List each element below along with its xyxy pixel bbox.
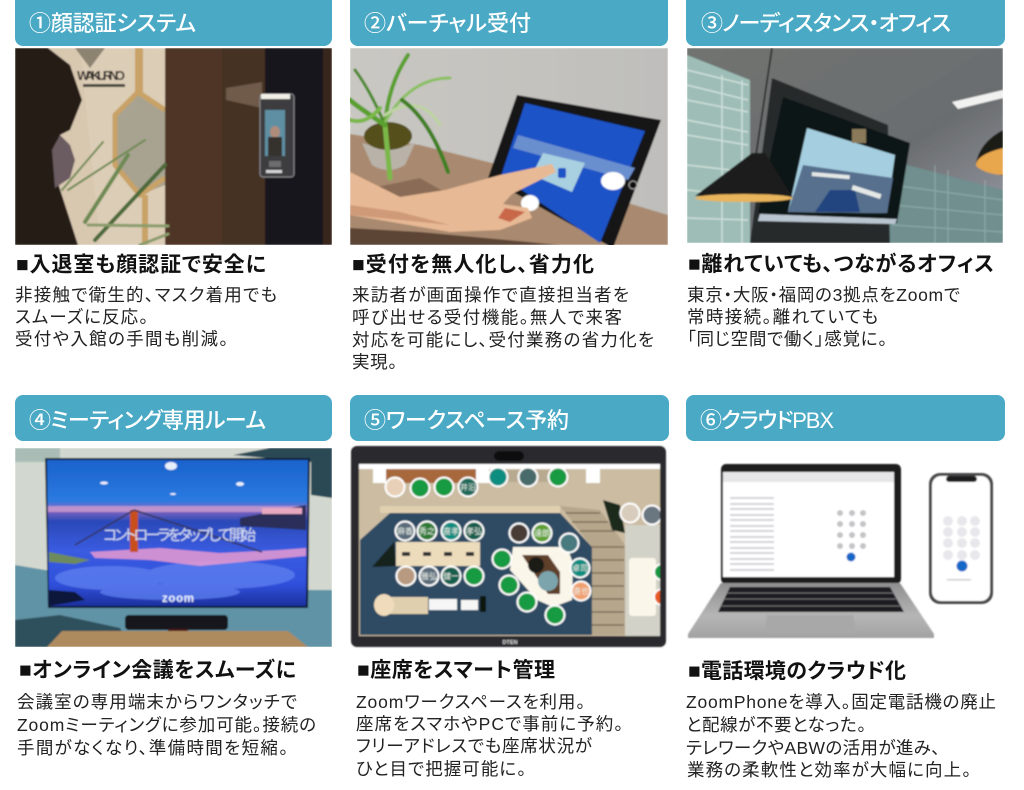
body text 6: ZoomPhoneを導入。固定電話機の廃止 (686, 692, 996, 712)
photo: seat map on display: DTEN (503, 640, 518, 646)
body text 6: 業務の柔軟性と効率が大幅に向上。 (687, 760, 971, 780)
photo: Zoom Rooms display (15, 448, 332, 647)
header bar 4: ④ミーティング専用ルーム (29, 408, 266, 433)
body text 3: 常時接続。離れていても (687, 307, 878, 327)
photo: Zoom Rooms display: コントローラをタップして開始 (103, 527, 256, 544)
header bar 5: ⑤ワークスペース予約 (364, 408, 569, 433)
photo: face recognition terminal: WAKURINO (77, 68, 125, 83)
photo: seat map on display: 麻香 (397, 526, 413, 536)
heading 1: ■入退室も顔認証で安全に (16, 254, 266, 276)
header bar 6: ⑥クラウドPBX (700, 408, 834, 433)
body text 3 (687, 285, 960, 349)
photo: laptop and smartphone dialer (687, 462, 994, 639)
body text 6: と配線が不要となった。 (686, 715, 866, 735)
body text 2: 呼び出せる受付機能。無人で来客 (352, 308, 622, 328)
body text 6 (686, 692, 996, 780)
body text 1: 非接触で衛生的、マスク着用でも (15, 285, 277, 305)
body text 4: 会議室の専用端末からワンタッチで (17, 692, 297, 712)
body text 4 (17, 692, 316, 758)
panel: 5 workspace reservation (350, 395, 670, 779)
heading 3: ■離れていても、つながるオフィス (688, 252, 994, 276)
body text 2: 対応を可能にし、受付業務の省力化を (352, 330, 654, 350)
photo: seat map on display (350, 445, 668, 648)
panel: 3 no-distance office (686, 0, 1005, 349)
laptop (688, 464, 934, 638)
body text 3: 「同じ空間で働く」感覚に。 (687, 329, 887, 349)
heading 4: ■オンライン会議をスムーズに (19, 658, 296, 682)
body text 5: Zoomワークスペースを利用。 (356, 692, 585, 712)
body text 2: 来訪者が画面操作で直接担当者を (352, 285, 629, 305)
photo: Zoom Rooms display: zoom (162, 593, 194, 605)
photo: seat map on display: 直也 (573, 586, 589, 596)
body text 1: 受付や入館の手間も削減。 (15, 329, 228, 349)
body text 6: テレワークやABWの活用が進み、 (686, 738, 940, 758)
smartphone (929, 473, 993, 604)
photo: seat map on display: 卓司 (572, 563, 588, 573)
header bar 2 (350, 0, 668, 46)
header bar 3 (686, 0, 1005, 46)
panel: 6 cloud PBX (686, 395, 1005, 780)
body text 2: 実現。 (352, 352, 397, 372)
body text 5: フリーアドレスでも座席状況が (356, 736, 593, 756)
body text 1 (15, 285, 277, 349)
heading 2: ■受付を無人化し、省力化 (352, 254, 594, 276)
photo: seat map on display: 雅弘 (421, 571, 437, 581)
panel: 4 meeting room (15, 395, 332, 758)
photo: wall monitor linking offices (687, 48, 1003, 243)
body text 3: 東京・大阪・福岡の3拠点をZoomで (687, 285, 960, 305)
panel: 2 virtual reception (350, 0, 668, 372)
body text 5: 座席をスマホやPCで事前に予約。 (356, 714, 623, 734)
heading 6: ■電話環境のクラウド化 (688, 660, 906, 683)
photo: seat map on display: 秀之 (419, 526, 435, 536)
photo: seat map on display: 健一 (443, 571, 459, 581)
body text 4: 手間がなくなり、準備時間を短縮。 (17, 738, 288, 758)
panel: 1 face recognition system (15, 0, 332, 349)
header bar 4 (15, 395, 332, 441)
photo: seat map on display: 井沿 (460, 482, 476, 492)
body text 5: ひと目で把握可能に。 (356, 759, 526, 779)
body text 2 (352, 285, 654, 372)
header bar 2: ②バーチャル受付 (364, 11, 531, 36)
body text 4: Zoomミーティングに参加可能。接続の (17, 715, 316, 735)
header bar 3: ③ノーディスタンス・オフィス (701, 11, 951, 36)
photo: seat map on display: 達朗 (534, 528, 550, 538)
header bar 1 (15, 0, 332, 46)
photo: seat map on display: 直孝 (443, 526, 459, 536)
body text 5 (356, 692, 623, 779)
heading 5: ■座席をスマート管理 (357, 659, 555, 682)
photo: seat map on display: 孝弘 (466, 527, 482, 536)
photo: face recognition terminal (15, 48, 332, 245)
body text 1: スムーズに反応。 (15, 307, 148, 327)
header bar 6 (686, 395, 1005, 441)
header bar 1: ①顔認証システム (29, 11, 196, 36)
header bar 5 (350, 395, 669, 441)
photo: hand tapping reception tablet (350, 48, 668, 245)
